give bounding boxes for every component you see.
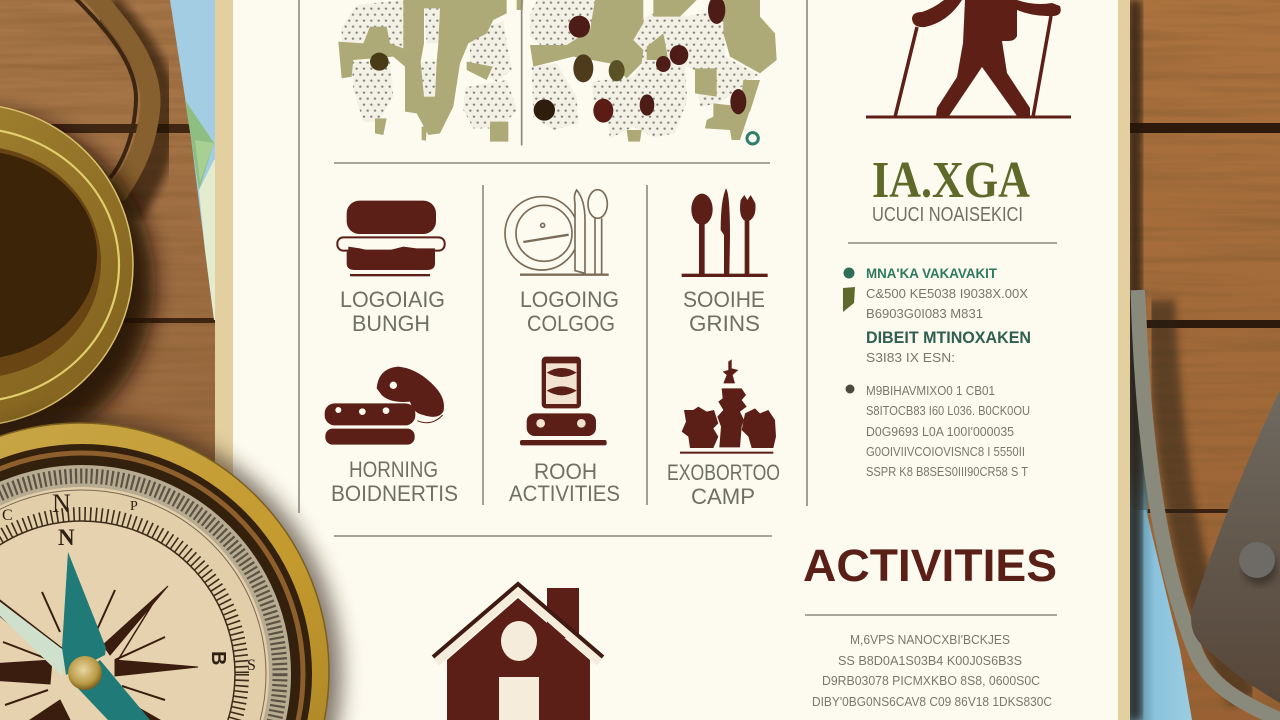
compass body (0, 417, 342, 720)
compass scale letters: N (58, 525, 75, 550)
compass scale letters: S (247, 657, 256, 674)
map sheet under the paper, left (170, 0, 225, 320)
label: fourth item: BOIDNERTIS (331, 481, 458, 506)
label: third item: GRINS (689, 311, 760, 336)
label: third item: SOOIHE (683, 287, 765, 312)
label: first item: LOGOIAIG (340, 287, 445, 312)
compass scale letters (2, 489, 256, 674)
activities paragraph: DIBY'0BG0NS6CAV8 C09 86V18 1DKS830C (812, 694, 1052, 709)
label: fifth item (509, 459, 620, 506)
icon: bread (325, 367, 444, 445)
compass scale letters: P (130, 499, 138, 514)
map olive land (338, 0, 777, 142)
label: second item (520, 287, 619, 336)
icon: spoon knife fork (682, 188, 768, 277)
map sheet under the paper, right (1130, 290, 1192, 720)
compass scale letters: B (207, 651, 229, 665)
side notes: G0OIVIIVCOIOVISNC8 I 5550II (866, 444, 1025, 459)
compass scale letters: C (2, 507, 13, 524)
heading: activities: ACTIVITIES (803, 540, 1057, 591)
paper sheet (215, 0, 1130, 720)
label: second item: LOGOING (520, 287, 619, 312)
grid divider lines (299, 0, 1057, 615)
compass scale letters: N (52, 489, 71, 518)
label: second item: COLGOG (527, 311, 615, 336)
label: first item (340, 287, 445, 336)
label: fourth item: HORNING (349, 457, 438, 482)
side notes: S3I83 IX ESN: (866, 350, 955, 365)
olive heading: UCUCI NOAISEKICI (872, 204, 1023, 226)
olive heading (872, 152, 1030, 226)
icon: house (433, 584, 603, 720)
side notes: B6903G0I083 M831 (866, 306, 983, 321)
label: sixth item: CAMP (691, 484, 755, 509)
icon: plate and cutlery (505, 190, 609, 275)
map compass badge (747, 133, 758, 144)
label: fifth item: ACTIVITIES (509, 481, 620, 506)
side notes: M9BIHAVMIXO0 1 CB01 (866, 383, 995, 398)
map location markers (370, 0, 746, 123)
activities paragraph: D9RB03078 PICMXKBO 8S8, 0600S0C (822, 673, 1040, 688)
activities paragraph: SS B8D0A1S03B4 K00J0S6B3S (838, 653, 1022, 668)
activities paragraph: M,6VPS NANOCXBI'BCKJES (850, 632, 1010, 647)
activities paragraph (812, 632, 1052, 709)
side notes: MNA'KA VAKAVAKIT (866, 265, 997, 281)
label: sixth item (667, 460, 780, 509)
olive heading: IA.XGA (872, 152, 1030, 209)
icon: hiker (866, 0, 1071, 118)
compass rose (0, 586, 198, 720)
label: sixth item: EXOBORTOO (667, 460, 780, 485)
map dotted land (342, 0, 758, 138)
strap and backpack plate (1138, 290, 1280, 720)
shadow right of paper (1128, 0, 1142, 720)
world map (338, 0, 777, 145)
bullet (846, 384, 854, 394)
side notes: S8ITOCB83 I60 L036. B0CK0OU (866, 403, 1030, 418)
icon grid (325, 188, 776, 454)
compass lid (0, 104, 155, 457)
side notes: DIBEIT MTINOXAKEN (866, 328, 1031, 347)
activity labels (331, 287, 780, 509)
icon: lantern stand (520, 357, 607, 445)
icon: green pin (843, 268, 855, 312)
icon: burger (337, 201, 445, 276)
icon: camp (680, 359, 776, 454)
side notes (843, 265, 1031, 479)
side notes: C&500 KE5038 I9038X.00X (866, 286, 1028, 301)
compass hinge ring (72, 0, 163, 212)
compass needle (0, 552, 150, 720)
side notes: SSPR K8 B8SES0III90CR58 S T (866, 464, 1028, 479)
label: first item: BUNGH (352, 311, 430, 336)
label: third item (683, 287, 765, 336)
label: fourth item (331, 457, 458, 506)
side notes: D0G9693 L0A 100I'000035 (866, 424, 1014, 439)
label: fifth item: ROOH (534, 459, 597, 484)
